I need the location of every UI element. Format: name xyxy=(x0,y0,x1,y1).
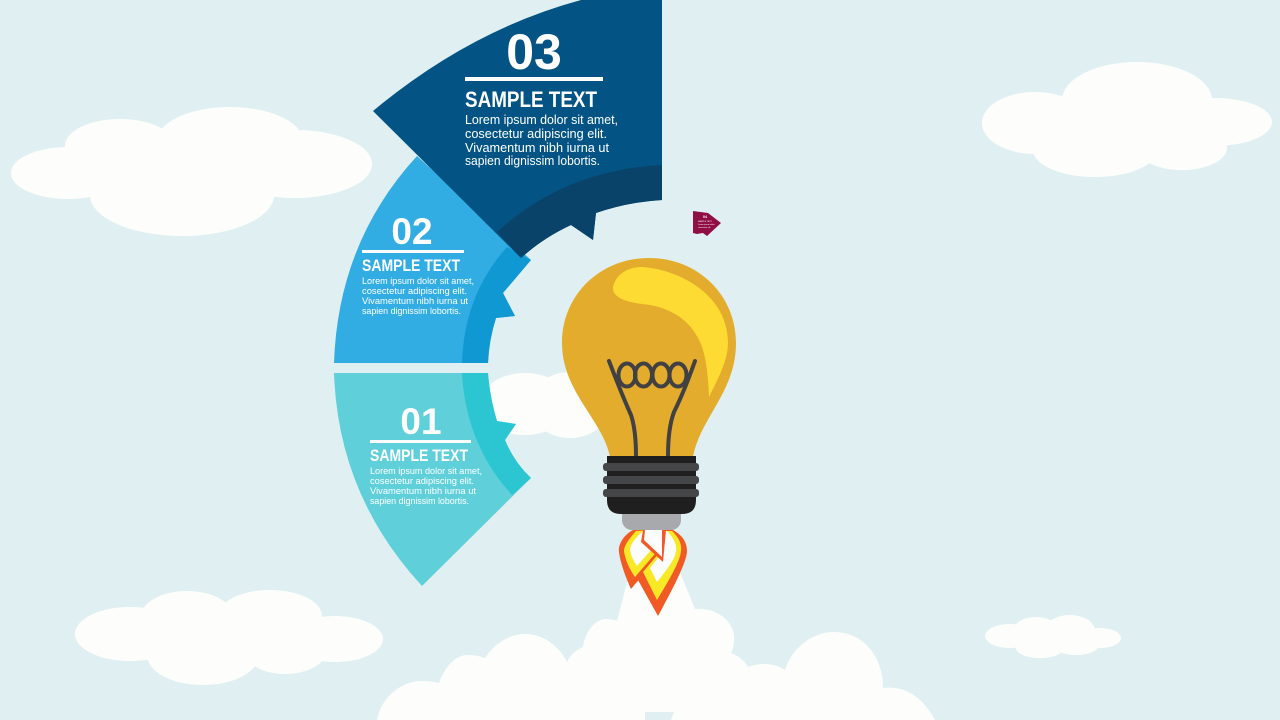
panel 01 rule xyxy=(370,440,471,443)
panel 02 wedge xyxy=(334,156,531,363)
panel 01 wedge xyxy=(334,373,531,586)
panel 02 number: 02 xyxy=(391,211,433,252)
panel 04 miniature xyxy=(693,211,721,236)
panel 04 miniature: 04 xyxy=(703,215,707,219)
panel 01 body: Lorem ipsum dolor sit amet, xyxy=(370,465,482,476)
cloud: top left xyxy=(11,107,372,236)
icon: rocket flames xyxy=(619,530,687,616)
cloud: bottom left xyxy=(75,590,383,685)
cloud: top right xyxy=(982,62,1272,177)
bulb highlight xyxy=(613,267,728,397)
bulb glass xyxy=(562,258,736,457)
panel 01 body: Vivamentum nibh iurna ut xyxy=(370,485,476,496)
panel 02 body: Lorem ipsum dolor sit amet, xyxy=(362,275,474,286)
panel 04 miniature: cosectetur elit xyxy=(698,226,711,229)
panel 02 body xyxy=(362,275,474,316)
panel 03 body: cosectetur adipiscing elit. xyxy=(465,127,607,141)
panel 01 xyxy=(334,373,531,586)
right flame xyxy=(638,530,687,616)
panel 01 inner band xyxy=(462,373,531,495)
bulb base xyxy=(607,456,696,514)
panel 03 body: Vivamentum nibh iurna ut xyxy=(465,141,610,155)
panel 03 rule xyxy=(465,77,603,81)
filament xyxy=(609,361,695,456)
panel 03 number: 03 xyxy=(506,24,562,80)
panel 03 body: sapien dignissim lobortis. xyxy=(465,154,600,168)
panel 02 rule xyxy=(362,250,464,253)
panel 02 inner band xyxy=(462,247,531,363)
panel 03 title: SAMPLE TEXT xyxy=(465,87,597,112)
panel 01 title: SAMPLE TEXT xyxy=(370,447,468,465)
panel 03 body xyxy=(465,113,618,168)
panel 03 inner band xyxy=(497,165,662,258)
panel 04 miniature: SAMPLE TEXT xyxy=(698,220,713,223)
icon: light bulb xyxy=(562,258,736,530)
panel 01 number: 01 xyxy=(400,401,442,442)
panel 01 body xyxy=(370,465,482,506)
left flame xyxy=(619,530,672,589)
panel 02 body: sapien dignissim lobortis. xyxy=(362,305,461,316)
panel 04 miniature: Lorem ipsum dolor xyxy=(698,224,715,226)
panel 01 body: sapien dignissim lobortis. xyxy=(370,495,469,506)
panel 02 body: Vivamentum nibh iurna ut xyxy=(362,295,468,306)
panel 02 body: cosectetur adipiscing elit. xyxy=(362,285,467,296)
small center flame xyxy=(641,530,666,562)
panel 03 body: Lorem ipsum dolor sit amet, xyxy=(465,113,618,127)
cloud: bottom right small xyxy=(985,615,1121,658)
bulb neck gray xyxy=(622,505,681,530)
base thread stripes xyxy=(603,463,699,497)
panel 03 xyxy=(373,0,662,258)
panel 03 wedge xyxy=(373,0,662,258)
panel 02 xyxy=(334,156,531,363)
panel 01 body: cosectetur adipiscing elit. xyxy=(370,475,474,486)
panel 02 title: SAMPLE TEXT xyxy=(362,257,460,275)
cloud: rocket smoke at bottom xyxy=(377,560,935,720)
cloud: behind bulb xyxy=(480,372,610,438)
